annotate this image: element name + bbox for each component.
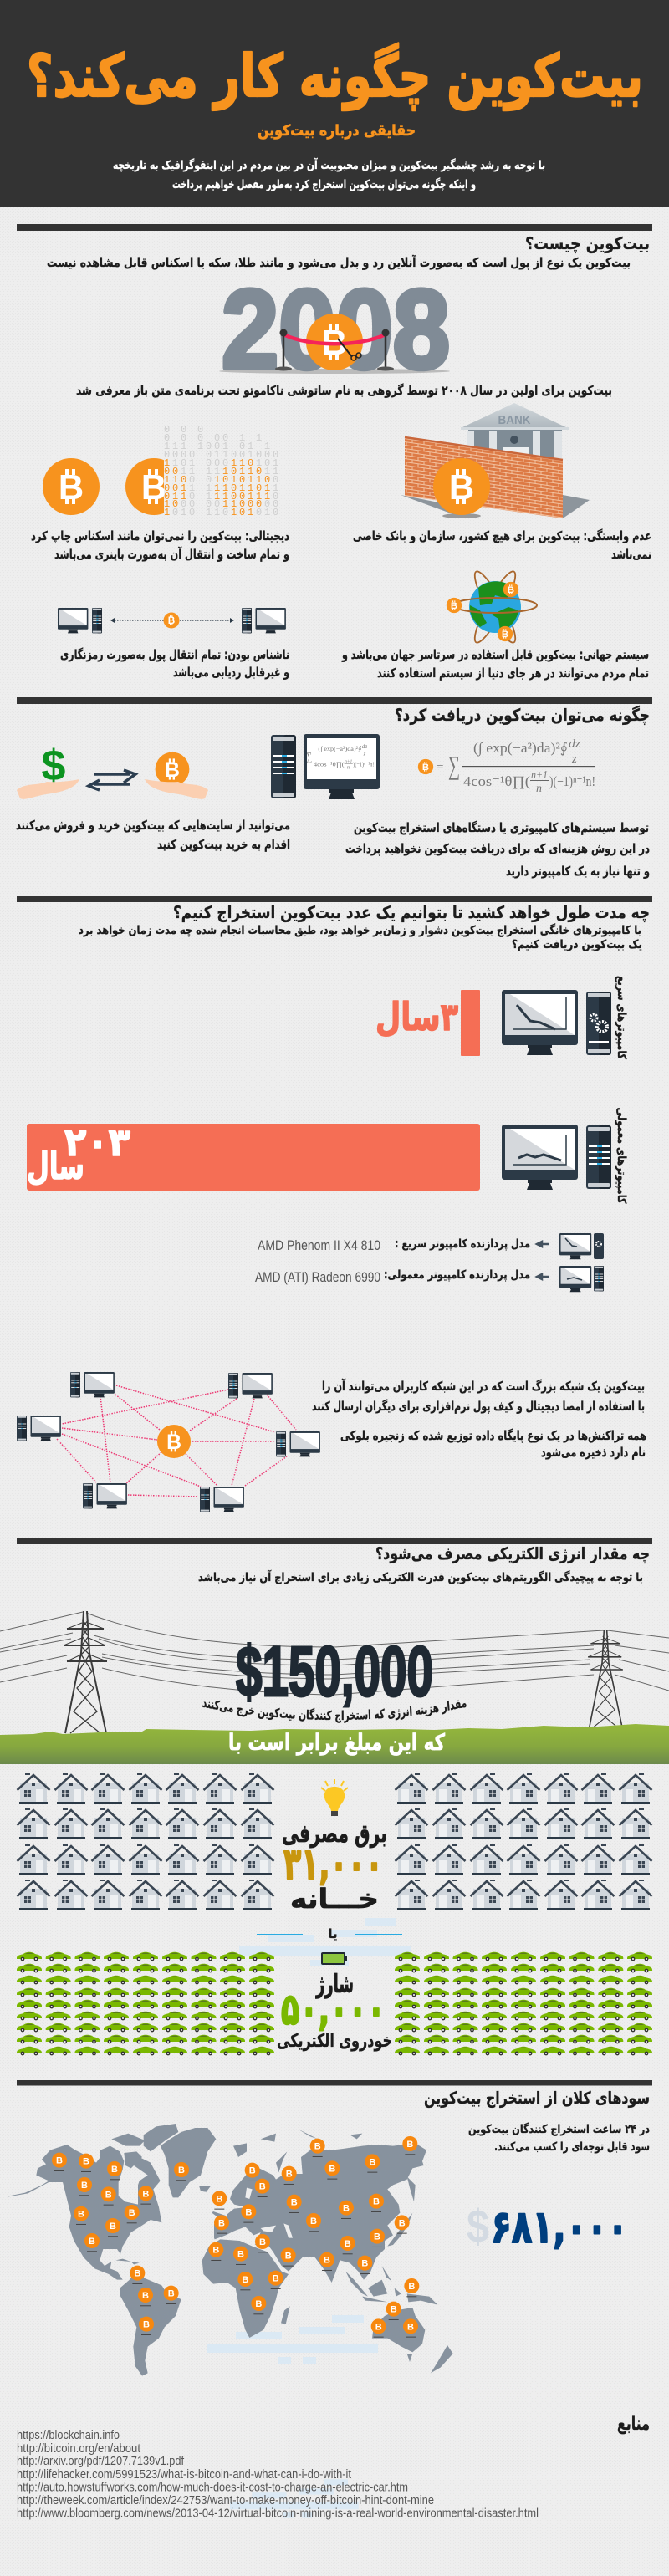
bar: normal computer 203 years: سال	[27, 1145, 84, 1188]
illustration: 2008 with ribbon: 2008	[222, 268, 450, 392]
text: buying: می‌توانید از سایت‌هایی که بیت‌کوین خرید و فروش می‌کنند	[16, 818, 290, 833]
text: anonymity: و غیرقابل ردیابی می‌باشد	[173, 665, 289, 680]
intro text: و اینکه چگونه می‌توان بیت‌کوین استخراج کرد به‌طور مفصل خواهیم پرداخت	[172, 177, 476, 191]
panel: electricity use	[0, 1538, 669, 2055]
subtitle: حقایقی درباره بیت‌کوین	[258, 122, 416, 140]
stat: 50,000 electric cars	[277, 1970, 392, 2052]
source list: http://bitcoin.org/en/about	[17, 2441, 141, 2456]
text: independence: نمی‌باشد	[611, 547, 651, 562]
amount: 150,000 dollars: $150,000	[236, 1632, 433, 1711]
map: Americas	[8, 2124, 216, 2376]
panel: what is bitcoin	[17, 224, 652, 681]
label: fast computers: کامپیوترهای سریع	[615, 976, 628, 1060]
text: anonymity	[60, 647, 289, 680]
illustration: binary coin: 111 1001 01 1	[164, 441, 273, 452]
header panel	[0, 0, 669, 207]
source list: http://auto.howstuffworks.com/how-much-does-it-cost-to-charge-an-electric-car.htm	[17, 2480, 408, 2495]
illustration: binary coin: 1101 000110101	[164, 457, 281, 469]
text: network description	[312, 1379, 646, 1460]
text: global system	[341, 647, 649, 681]
text: anonymity: ناشناس بودن: تمام انتقال پول به‌صورت رمزنگاری	[60, 647, 289, 663]
illustration: mining computer	[271, 734, 380, 799]
icon: normal computer	[502, 1125, 611, 1190]
source list: http://lifehacker.com/5991523/what-is-bitcoin-and-what-can-i-do-with-it	[17, 2467, 352, 2482]
grass banner: که این مبلغ برابر است با	[228, 1730, 445, 1756]
text: digital	[31, 528, 289, 562]
heading: منابع	[617, 2414, 650, 2435]
intro text	[113, 157, 545, 191]
watermark	[239, 1918, 411, 1966]
legend: normal processor	[255, 1266, 604, 1292]
text: buying	[16, 818, 290, 852]
stat: 50,000 electric cars: شارژ	[315, 1970, 354, 1999]
cars grid	[17, 1952, 652, 2055]
illustration: binary coin: 0 0 0 00 1 1	[164, 432, 264, 444]
stat: 31,000 homes: ۳۱,۰۰۰	[283, 1839, 383, 1890]
source list: https://blockchain.info	[17, 2428, 120, 2442]
world map	[8, 2124, 453, 2376]
illustration: binary coin: 0011 111011011	[164, 482, 281, 494]
map: Eurasia, Africa, Oceania	[199, 2130, 453, 2373]
stat: 31,000 homes	[282, 1819, 387, 1915]
icon: battery	[321, 1952, 347, 1965]
text: mining	[345, 820, 650, 880]
power lines	[0, 1611, 669, 1733]
heading: بیت‌کوین چیست؟	[525, 233, 650, 254]
panel: how to get bitcoin	[16, 697, 652, 880]
legend: normal processor: AMD (ATI) Radeon 6990	[255, 1269, 380, 1285]
illustration: binary coin: 0110 111001110	[164, 491, 281, 502]
panel: sources	[17, 2414, 650, 2520]
formula	[418, 737, 595, 795]
stat: 31,000 homes: خـــانه	[290, 1883, 379, 1915]
illustration: binary coin: 0 0 0	[164, 424, 206, 436]
source list: http://arxiv.org/pdf/1207.7139v1.pdf	[17, 2454, 185, 2468]
houses grid	[17, 1773, 652, 1910]
text: digital: دیجیتالی: بیت‌کوین را نمی‌توان مانند اسکناس چاپ کرد	[31, 528, 289, 544]
amount: 681,000 dollars	[467, 2200, 628, 2253]
legend: fast processor	[258, 1233, 604, 1259]
network diagram	[17, 1372, 320, 1512]
text: 24 hour earnings: در ۲۴ ساعت استخراج کنندگان بیت‌کوین	[468, 2122, 650, 2136]
illustration: exchange dollar and bitcoin: $	[42, 742, 66, 790]
icon: fast computer	[502, 990, 611, 1055]
bar: fast computer 3 years	[375, 990, 480, 1056]
source list	[17, 2428, 539, 2520]
text: digital: و تمام ساخت و انتقال آن به‌صورت باینری می‌باشد	[54, 547, 289, 562]
illustration: bank behind wall	[401, 403, 590, 518]
illustration: binary coin: 1100 010101100	[164, 474, 281, 486]
intro text	[79, 923, 642, 951]
watermark	[207, 2315, 378, 2364]
illustration: binary coin: 1010 110101010	[164, 507, 281, 518]
intro text: با توجه به رشد چشمگیر بیت‌کوین و میزان محبوبیت آن در بین مردم در این اینفوگرافیک به تاریخچه	[113, 157, 545, 172]
watermark	[230, 2479, 359, 2518]
legend: fast processor: مدل پردازنده کامپیوتر سریع :	[395, 1237, 530, 1251]
illustration: binary coin: 0011 111011011	[164, 466, 281, 477]
source list: http://theweek.com/article/index/242753/want-to-make-money-off-bitcoin-hint-dont-mine	[17, 2493, 434, 2507]
source list: http://www.bloomberg.com/news/2013-04-12/virtual-bitcoin-mining-is-a-real-world-environmental-disaster.html	[17, 2507, 539, 2520]
bar: fast computer 3 years: ۳سال	[375, 994, 458, 1039]
amount: 681,000 dollars: ۶۸۱,۰۰۰	[491, 2201, 628, 2253]
stat: 50,000 electric cars: خودروی الکتریکی	[277, 2031, 392, 2052]
illustration: binary coin	[43, 424, 281, 518]
caption: بیت‌کوین برای اولین در سال ۲۰۰۸ توسط گروهی به نام ساتوشی ناکاموتو تحت برنامه‌ی متن باز معرفی شد	[76, 383, 612, 398]
text: 24 hour earnings	[468, 2122, 650, 2154]
stat: 50,000 electric cars: ۵۰,۰۰۰	[281, 1985, 386, 2035]
intro text: یک بیت‌کوین دریافت کنیم؟	[512, 938, 642, 951]
label: normal computers: کامپیوترهای معمولی	[615, 1107, 628, 1204]
stat: 31,000 homes: برق مصرفی	[282, 1819, 387, 1849]
illustration: exchange dollar and bitcoin	[17, 742, 208, 799]
illustration: binary coin: 1000 001100000	[164, 498, 281, 510]
amount: 681,000 dollars: $	[467, 2200, 489, 2252]
divider: or: یا	[328, 1926, 338, 1941]
illustration: peer transfer	[58, 608, 286, 633]
grass banner	[0, 1724, 669, 1764]
icon: light bulb	[321, 1779, 348, 1816]
bar: normal computer 203 years	[27, 1120, 480, 1191]
curved caption: مقدار هزینه انرژی که استخراج کنندگان بیت‌کوین خرج می‌کنند	[202, 1701, 467, 1723]
text: buying: اقدام به خرید بیت‌کوین کنید	[157, 837, 290, 852]
panel: how long to mine	[17, 896, 652, 1512]
illustration: bank behind wall: BANK	[498, 413, 531, 427]
text: independence	[353, 528, 651, 562]
formula: =	[437, 761, 443, 774]
legend: normal processor: مدل پردازنده کامپیوتر معمولی:	[384, 1268, 530, 1282]
illustration: binary coin: 0000 011001000	[164, 449, 281, 461]
panel: profits	[8, 2080, 652, 2376]
bar: normal computer 203 years: ۲۰۳	[64, 1120, 130, 1165]
legend: fast processor: AMD Phenom II X4 810	[258, 1237, 380, 1253]
illustration: globe	[447, 568, 537, 646]
